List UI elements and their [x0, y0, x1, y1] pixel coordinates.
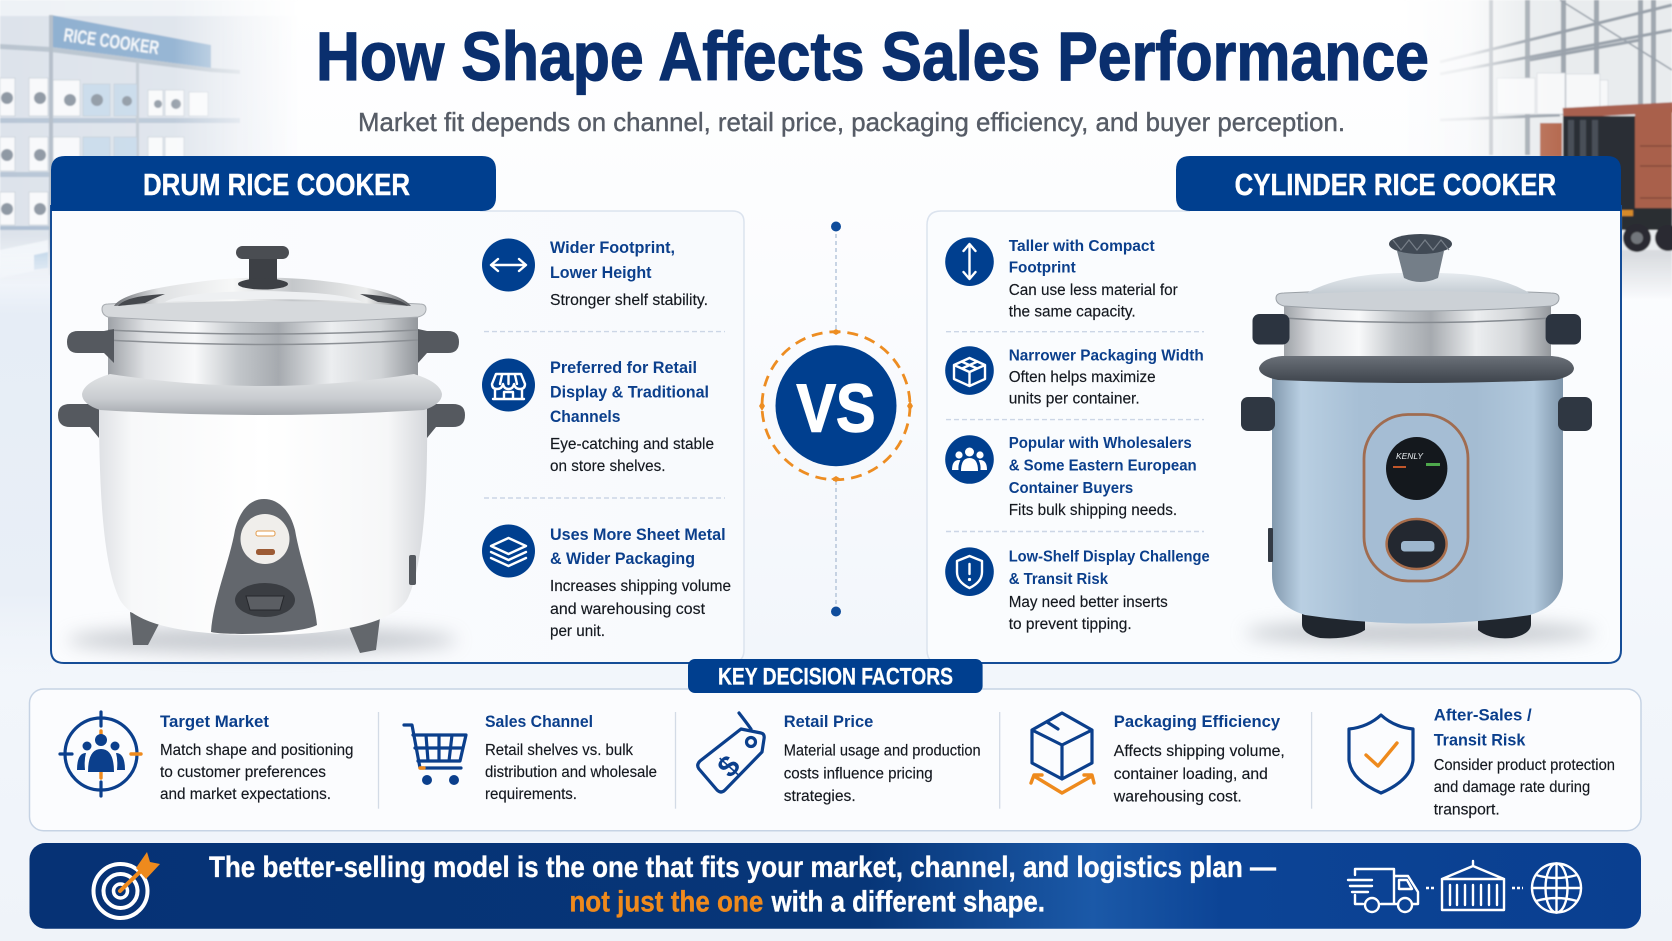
- factor: packaging efficiency: Packaging Efficiency: [1114, 712, 1281, 731]
- feature: taller compact footprint: Footprint: [1009, 260, 1076, 276]
- bottom takeaway banner: [30, 843, 1641, 929]
- icon: truck: [1348, 869, 1418, 912]
- feature: wider footprint: [482, 238, 708, 309]
- feature: wider footprint: Stronger shelf stability.: [550, 292, 708, 309]
- banner message: The better-selling model is the one that fits your market, channel, and logistics plan —: [209, 851, 1276, 884]
- banner message: with a different shape.: [771, 886, 1045, 919]
- VS badge with divider line: VS: [796, 370, 876, 446]
- feature: narrower packaging: units per container.: [1009, 391, 1140, 408]
- factor: target market: Target Market: [160, 712, 269, 731]
- icon: shield with check: [1349, 715, 1413, 793]
- factors panel: [30, 689, 1641, 831]
- VS badge with divider line: [759, 222, 913, 616]
- factor: after-sales transit risk: Transit Risk: [1434, 730, 1526, 749]
- icon: globe: [1532, 864, 1581, 912]
- feature: low-shelf challenge: May need better inserts: [1009, 594, 1168, 611]
- left margin shading: [0, 250, 51, 680]
- feature: taller compact footprint: Can use less material for: [1009, 282, 1178, 299]
- icon: price tag: [698, 713, 764, 792]
- feature: popular with wholesalers: & Some Eastern European: [1009, 458, 1197, 475]
- factor: sales channel: [404, 712, 657, 803]
- panel: cylinder rice cooker: [927, 156, 1621, 663]
- feature: low-shelf challenge: & Transit Risk: [1009, 571, 1108, 588]
- icon: group of people: [945, 435, 994, 484]
- heading: key decision factors: [688, 659, 983, 693]
- heading tab: drum rice cooker: DRUM RICE COOKER: [143, 167, 410, 202]
- icon: shopping cart: [404, 725, 466, 785]
- icon: price tag: $: [711, 749, 747, 784]
- icon: target audience: [60, 712, 141, 796]
- factor: retail price: Material usage and production: [784, 743, 981, 760]
- factor: target market: [60, 712, 354, 803]
- icon: package cube: [945, 346, 994, 395]
- retail store sign: RICE COOKER: [62, 25, 160, 59]
- feature: retail display: [482, 358, 714, 475]
- feature: more sheet metal: per unit.: [550, 623, 605, 640]
- factor: target market: to customer preferences: [160, 764, 326, 781]
- factor: after-sales transit risk: and damage rate during: [1434, 779, 1590, 796]
- feature: wider footprint: Lower Height: [550, 263, 652, 282]
- icon: horizontal arrow: [482, 238, 535, 292]
- factor: packaging efficiency: warehousing cost.: [1113, 789, 1242, 806]
- icon: bullseye with arrow: [94, 852, 160, 918]
- icon: stacked layers: [482, 524, 535, 578]
- feature: popular with wholesalers: Container Buyers: [1009, 480, 1133, 497]
- feature: taller compact footprint: the same capacity.: [1009, 304, 1136, 320]
- factor: packaging efficiency: [1031, 712, 1285, 806]
- icon: box with arrows: [1031, 713, 1094, 793]
- factor: sales channel: Sales Channel: [485, 712, 593, 731]
- heading tab: cylinder rice cooker: [1176, 156, 1621, 211]
- heading tab: drum rice cooker: [51, 156, 496, 211]
- factor: after-sales transit risk: Consider product protection: [1434, 757, 1615, 774]
- feature: narrower packaging: Often helps maximize: [1009, 369, 1156, 386]
- feature: retail display: on store shelves.: [550, 458, 666, 475]
- feature: low-shelf challenge: to prevent tipping.: [1009, 616, 1132, 633]
- title: How Shape Affects Sales Performance: [316, 18, 1429, 95]
- factor: retail price: strategies.: [784, 788, 856, 805]
- factor: retail price: Retail Price: [784, 712, 873, 731]
- background photo: warehouse and container truck: [1440, 0, 1672, 289]
- background photo: retail store shelves: [0, 0, 258, 275]
- heading: key decision factors: KEY DECISION FACTORS: [718, 664, 953, 691]
- factor: packaging efficiency: Affects shipping volume,: [1114, 743, 1285, 760]
- feature: popular with wholesalers: Fits bulk shipping needs.: [1009, 502, 1177, 519]
- factor: retail price: costs influence pricing: [784, 766, 933, 783]
- feature: taller compact footprint: Taller with Compact: [1009, 238, 1155, 255]
- arrow: container to globe: [1512, 887, 1523, 889]
- illustration: blue cylinder rice cooker: KENLY: [1396, 451, 1424, 461]
- feature: more sheet metal: Increases shipping volume: [550, 578, 731, 595]
- feature: retail display: Eye-catching and stable: [550, 436, 714, 453]
- factor: target market: Match shape and positioning: [160, 742, 354, 759]
- feature: wider footprint: Wider Footprint,: [550, 238, 675, 257]
- arrow: truck to container: [1426, 887, 1435, 889]
- icon: warning shield: [945, 547, 994, 596]
- icon: vertical arrow: [945, 237, 994, 286]
- feature: more sheet metal: & Wider Packaging: [550, 549, 695, 568]
- feature: retail display: Display & Traditional: [550, 382, 709, 402]
- icon: shipping container: [1442, 861, 1504, 910]
- factor: sales channel: distribution and wholesale: [485, 764, 657, 781]
- factor: sales channel: Retail shelves vs. bulk: [485, 742, 634, 759]
- factor: after-sales transit risk: [1349, 706, 1615, 819]
- panel: drum rice cooker: [51, 156, 744, 663]
- factor: after-sales transit risk: After-Sales /: [1434, 706, 1532, 725]
- retail store sign: [51, 15, 211, 68]
- factor: target market: and market expectations.: [160, 786, 331, 803]
- feature: low-shelf challenge: Low-Shelf Display Challenge: [1009, 549, 1210, 566]
- feature: popular with wholesalers: Popular with Wholesalers: [1009, 435, 1192, 452]
- feature: more sheet metal: Uses More Sheet Metal: [550, 525, 726, 544]
- feature: narrower packaging: Narrower Packaging Width: [1009, 347, 1204, 364]
- feature: more sheet metal: and warehousing cost: [550, 601, 706, 618]
- factor: sales channel: requirements.: [485, 786, 577, 803]
- illustration: blue cylinder rice cooker: [1241, 234, 1595, 645]
- feature: narrower packaging: [945, 346, 1204, 408]
- feature: more sheet metal: [482, 524, 731, 640]
- subtitle: Market fit depends on channel, retail price, packaging efficiency, and buyer perception.: [358, 107, 1345, 137]
- feature list: cylinder rice cooker: [945, 237, 1210, 633]
- feature: popular with wholesalers: [945, 435, 1197, 519]
- feature: retail display: Channels: [550, 407, 620, 426]
- factor: retail price: [698, 712, 981, 805]
- feature: retail display: Preferred for Retail: [550, 358, 697, 377]
- illustration: white drum rice cooker: [58, 246, 465, 653]
- banner message: [209, 851, 1276, 919]
- heading tab: cylinder rice cooker: CYLINDER RICE COOKER: [1235, 167, 1556, 202]
- feature: taller compact footprint: [945, 237, 1178, 320]
- factor: after-sales transit risk: transport.: [1434, 802, 1500, 819]
- banner message: not just the one: [569, 886, 763, 919]
- feature: low-shelf challenge: [945, 547, 1210, 633]
- icon: storefront: [482, 358, 535, 412]
- factor: packaging efficiency: container loading, and: [1114, 766, 1268, 783]
- feature list: drum rice cooker: [482, 238, 731, 640]
